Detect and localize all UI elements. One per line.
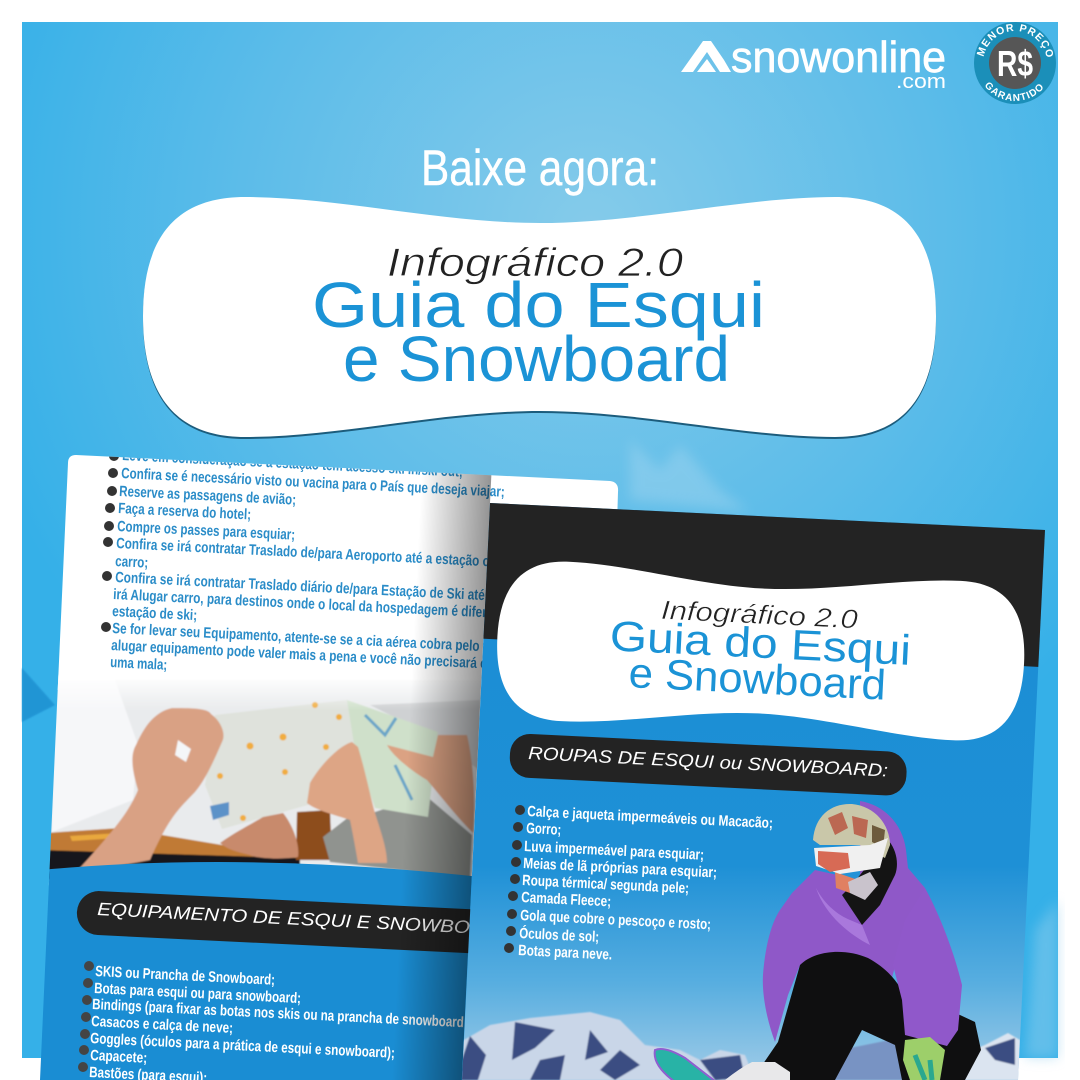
clothing list: Calça e jaqueta impermeáveis ou Macacão; bbox=[527, 803, 773, 832]
back page: checklist and equipment bbox=[30, 447, 630, 1080]
equipment heading pill: EQUIPAMENTO DE ESQUI E SNOWBO bbox=[97, 899, 470, 937]
small board title: Guia do Esqui bbox=[609, 612, 912, 675]
clothing list: Meias de lã próprias para esquiar; bbox=[523, 855, 717, 881]
checklist text: Confira se irá contratar Traslado de/para Aeroporto até a estação o bbox=[116, 535, 490, 570]
small board title: e Snowboard bbox=[628, 649, 887, 710]
checklist text: Reserve as passagens de avião; bbox=[119, 483, 296, 509]
checklist text: carro; bbox=[115, 553, 149, 572]
main snowboard title panel: Infográfico 2.0 bbox=[387, 241, 683, 285]
heading: baixe agora: Baixe agora: bbox=[421, 140, 659, 196]
equipment list: Bindings (para fixar as botas nos skis ou na prancha de snowboard bbox=[92, 996, 464, 1031]
logo: snowonline.com bbox=[681, 33, 946, 93]
badge: menor preço garantido: GARANTIDO bbox=[986, 82, 1043, 102]
clothing list: Gorro; bbox=[526, 820, 562, 839]
clothing list bbox=[504, 803, 773, 964]
main snowboard title panel: e Snowboard bbox=[343, 323, 730, 395]
equipment list: Goggles (óculos para a prática de esqui e snowboard); bbox=[90, 1030, 395, 1062]
equipment list: Casacos e calça de neve; bbox=[91, 1013, 233, 1037]
snowboarder figure bbox=[725, 801, 981, 1080]
checklist text: Se for levar seu Equipamento, atente-se se a cia aérea cobra pelo t bbox=[112, 620, 487, 655]
main snowboard title panel bbox=[143, 197, 936, 439]
badge: menor preço garantido bbox=[974, 22, 1056, 104]
front page: clothing bbox=[450, 500, 1060, 1080]
checklist text: Compre os passes para esquiar; bbox=[117, 518, 295, 544]
logo: snowonline.com: .com bbox=[896, 71, 946, 93]
clothing heading pill bbox=[509, 733, 908, 796]
badge: menor preço garantido: R$ bbox=[997, 43, 1033, 84]
checklist text: estação de ski; bbox=[112, 603, 198, 624]
checklist text: alugar equipamento pode valer mais a pena e você não precisará c bbox=[111, 637, 487, 672]
checklist text: Confira se irá contratar Traslado diário de/para Estação de Ski até bbox=[115, 569, 485, 604]
small board title bbox=[493, 558, 1028, 744]
equipment list: Botas para esqui ou para snowboard; bbox=[94, 980, 301, 1007]
checklist text: Leve em consideração se a estação tem acesso ski in/ski out; bbox=[122, 447, 463, 481]
checklist text: Confira se é necessário visto ou vacina para o País que deseja viajar; bbox=[121, 465, 505, 501]
clothing list: Óculos de sol; bbox=[519, 924, 600, 946]
logo: snowonline.com: snowonline bbox=[731, 33, 946, 82]
badge: menor preço garantido: MENOR PREÇO bbox=[976, 24, 1053, 57]
snowboard bbox=[655, 1049, 716, 1080]
equipment list: SKIS ou Prancha de Snowboard; bbox=[95, 963, 275, 989]
clothing heading pill: ROUPAS DE ESQUI ou SNOWBOARD: bbox=[528, 743, 888, 781]
clothing list: Gola que cobre o pescoço e rosto; bbox=[520, 907, 711, 933]
photo: hands over map bbox=[30, 675, 490, 885]
blue equipment area bbox=[30, 862, 490, 1080]
equipment list bbox=[78, 961, 464, 1080]
equipment list: Capacete; bbox=[90, 1047, 148, 1067]
clothing list: Roupa térmica/ segunda pele; bbox=[522, 872, 689, 897]
clothing list: Luva impermeável para esquiar; bbox=[524, 838, 704, 864]
mountains bbox=[455, 1012, 1020, 1080]
checklist text bbox=[101, 447, 505, 674]
checklist text: uma mala; bbox=[110, 654, 168, 674]
main snowboard title panel: Guia do Esqui bbox=[312, 269, 765, 341]
checklist text: irá Alugar carro, para destinos onde o local da hospedagem é difer bbox=[113, 586, 487, 621]
equipment heading pill bbox=[76, 891, 470, 954]
small board title: Infográfico 2.0 bbox=[660, 595, 859, 634]
clothing list: Camada Fleece; bbox=[521, 889, 612, 910]
clothing list: Botas para neve. bbox=[518, 942, 613, 964]
checklist text: Faça a reserva do hotel; bbox=[118, 500, 251, 523]
